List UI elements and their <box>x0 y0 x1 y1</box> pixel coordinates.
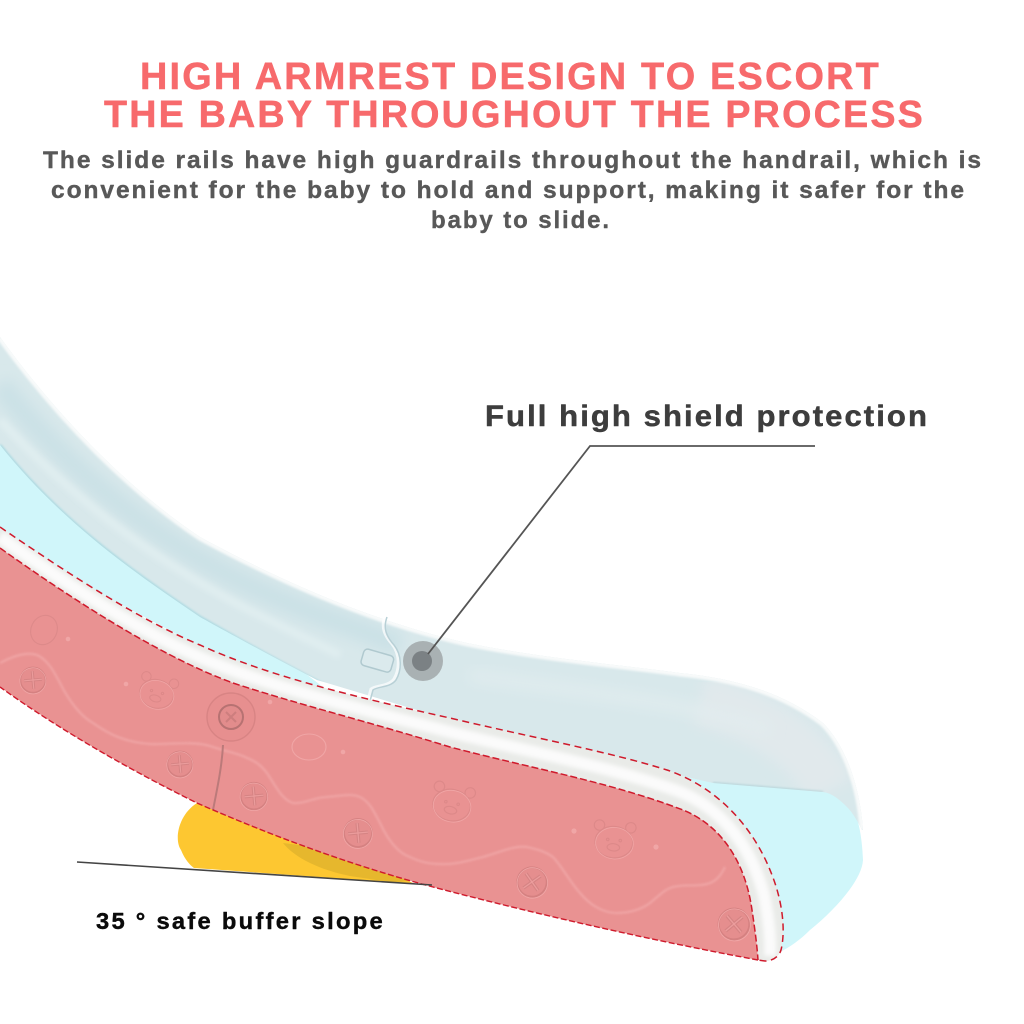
guardrail joint <box>360 616 400 701</box>
screw details <box>14 662 752 942</box>
red dashed outline <box>0 527 783 961</box>
title: HIGH ARMREST DESIGN TO ESCORT <box>140 56 881 98</box>
white rim <box>0 527 783 961</box>
description text <box>43 147 983 234</box>
callout label: Full high shield protection <box>485 400 929 433</box>
description text: convenient for the baby to hold and support, making it safer for the <box>51 177 966 204</box>
pink side panel <box>0 548 758 960</box>
embossed wave <box>0 654 725 913</box>
cyan slide surface <box>0 440 863 952</box>
slope label: 35 ° safe buffer slope <box>96 908 385 934</box>
callout: safe buffer slope <box>77 862 432 934</box>
description text: The slide rails have high guardrails throughout the handrail, which is <box>43 147 983 174</box>
title: THE BABY THROUGHOUT THE PROCESS <box>104 94 925 136</box>
yellow buffer slope <box>178 803 415 884</box>
callout leader line <box>428 446 815 654</box>
guardrail <box>0 337 863 830</box>
slide illustration <box>0 337 863 961</box>
panel joint <box>207 693 255 810</box>
description text: baby to slide. <box>431 207 611 234</box>
slope leader line <box>77 862 432 885</box>
callout: full high shield protection <box>403 400 929 681</box>
title <box>104 56 925 136</box>
callout marker <box>403 641 443 681</box>
bear and apple embossing <box>26 611 659 861</box>
